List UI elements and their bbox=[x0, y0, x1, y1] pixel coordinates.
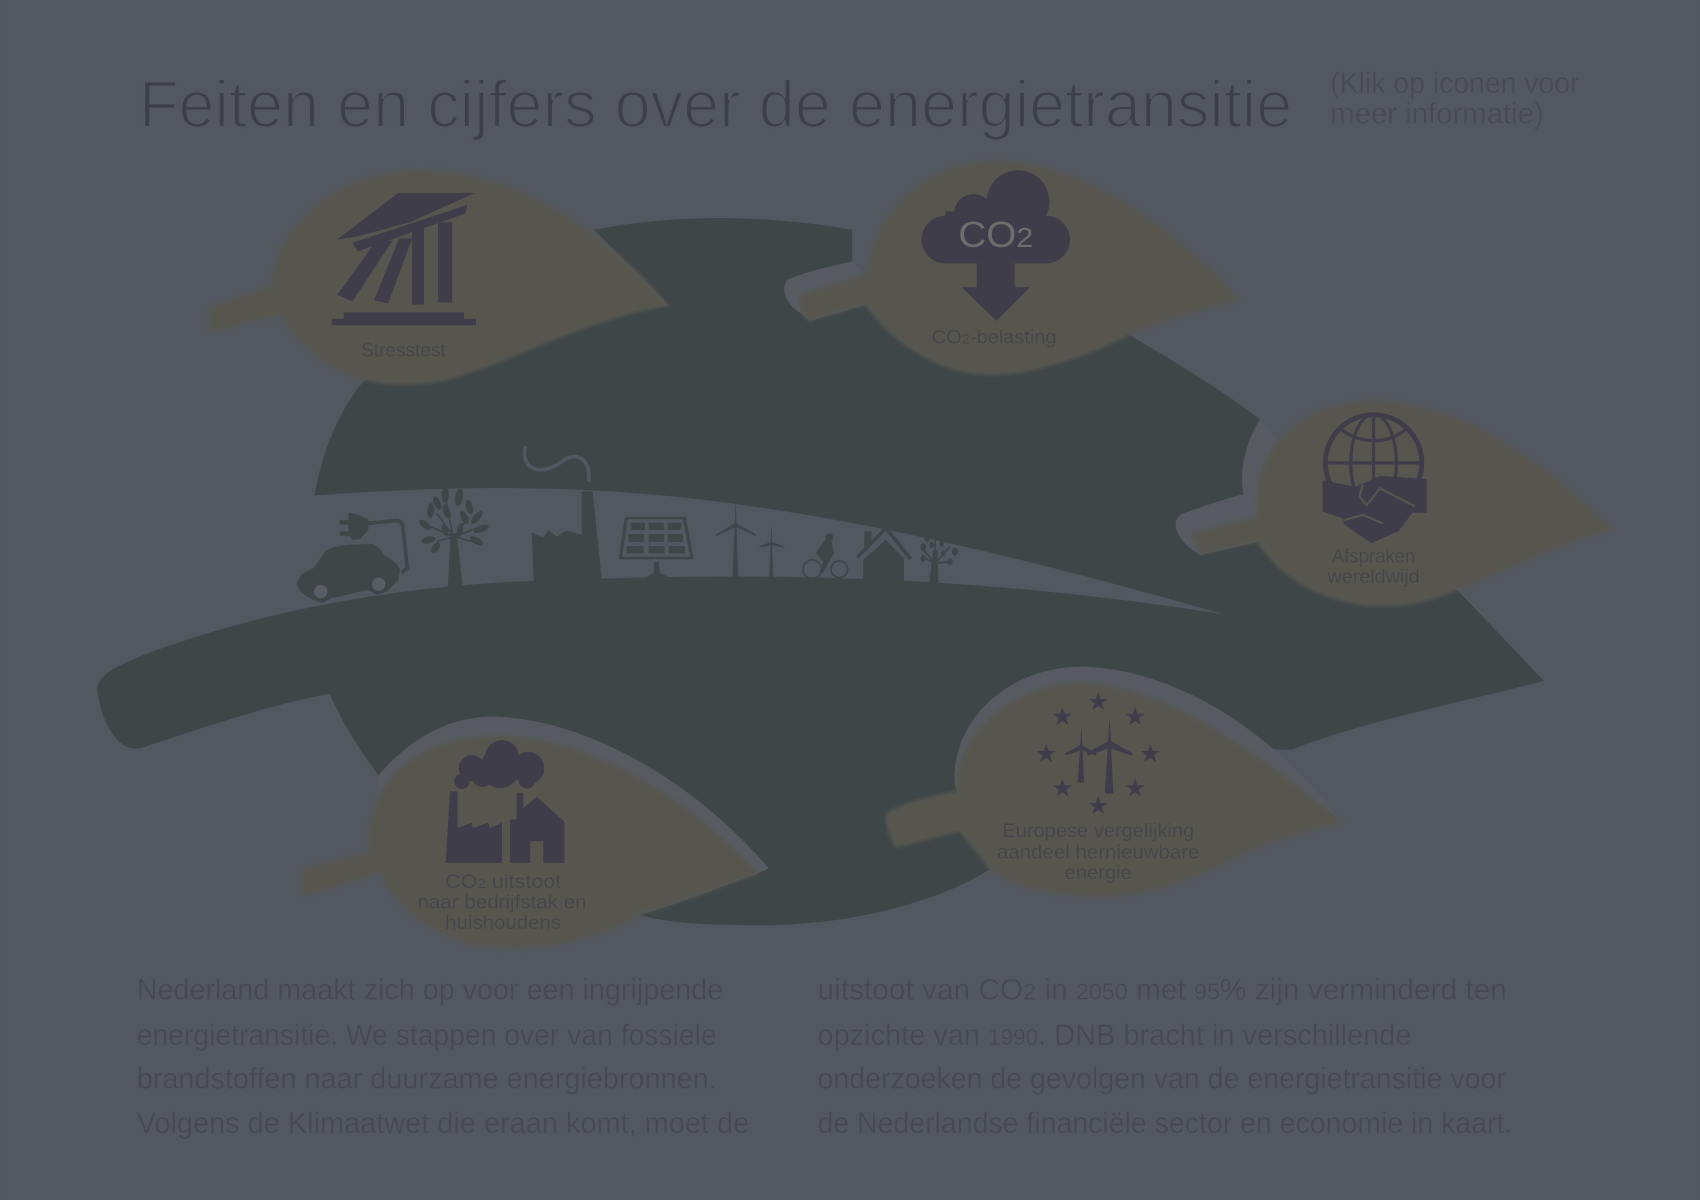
leaf panel: Afspraken wereldwijd bbox=[1176, 400, 1613, 606]
instruction note: meer informatie) bbox=[1330, 99, 1544, 131]
label: CO2 uitstoot bbox=[417, 872, 587, 934]
label: CO2 uitstoot: CO 2 uitstoot bbox=[445, 872, 562, 893]
body text: left column: energietransitie. We stappen over van fossiele bbox=[137, 1020, 717, 1052]
icon: cyclist bbox=[803, 533, 848, 579]
body text: left column: Nederland maakt zich op voor een ingrijpende bbox=[137, 974, 723, 1006]
icon: EU stars and wind turbines: ★ bbox=[1139, 740, 1161, 768]
label: Afspraken wereldwijd bbox=[1326, 547, 1420, 588]
label: CO2 uitstoot: naar bedrijfstak en bbox=[417, 892, 587, 913]
icon: CO2 cloud with arrow bbox=[922, 170, 1070, 321]
icon: EU stars and wind turbines: ★ bbox=[1087, 792, 1109, 820]
icon: EU stars and wind turbines: ★ bbox=[1124, 775, 1146, 803]
body text: left column bbox=[137, 974, 749, 1140]
body text: right column: opzichte van 1990. DNB bracht in verschillende bbox=[817, 1020, 1412, 1052]
label: Afspraken wereldwijd: Afspraken bbox=[1332, 547, 1415, 568]
leaf panel: Stresstest bbox=[209, 170, 669, 385]
label: Europese vergelijking: energie bbox=[1065, 863, 1132, 884]
label: CO2-belasting: CO2-belasting bbox=[932, 328, 1057, 349]
icon: wind turbines bbox=[716, 501, 785, 577]
icon: tree bbox=[417, 487, 490, 589]
body text: left column: Volgens de Klimaatwet die eraan komt, moet de bbox=[137, 1108, 749, 1140]
icon: globe and handshake bbox=[1323, 414, 1427, 543]
icon: factory, house and cloud bbox=[446, 740, 564, 863]
icon: factory with smoke bbox=[525, 447, 602, 587]
label: Europese vergelijking: Europese vergelijking bbox=[1002, 821, 1194, 842]
icon: EU stars and wind turbines: ★ bbox=[1051, 775, 1074, 803]
body text: right column: de Nederlandse financiële sector en economie in kaart. bbox=[817, 1108, 1512, 1140]
icon: EU stars and wind turbines: ★ bbox=[1087, 688, 1109, 716]
label: Stresstest: Stresstest bbox=[361, 341, 446, 362]
leaf panel: Europese vergelijking bbox=[886, 667, 1343, 897]
label: CO2 uitstoot: huishoudens bbox=[445, 913, 561, 934]
instruction note: (Klik op iconen voor bbox=[1330, 68, 1580, 100]
leaf panel: CO2-belasting bbox=[784, 160, 1240, 375]
icon: collapsing temple bbox=[332, 193, 476, 325]
body text: right column: uitstoot van CO2 in 2050 met 95% zijn verminderd ten bbox=[817, 974, 1507, 1006]
body text: right column: onderzoeken de gevolgen van de energietransitie voor bbox=[817, 1063, 1506, 1095]
icon: electric car bbox=[297, 513, 407, 603]
icon: EU stars and wind turbines: ★ bbox=[1124, 703, 1146, 731]
body text: left column: brandstoffen naar duurzame energiebronnen. bbox=[137, 1063, 717, 1095]
leaf panel: CO2 uitstoot bbox=[301, 717, 769, 949]
title: Feiten en cijfers over de energietransitie bbox=[139, 68, 1292, 142]
icon: small tree bbox=[920, 529, 958, 587]
icon: EU stars and wind turbines: ★ bbox=[1051, 703, 1074, 731]
big dark leaf illustration bbox=[97, 218, 1544, 925]
landscape icons row bbox=[297, 447, 958, 603]
body text: right column bbox=[817, 974, 1512, 1140]
label: Europese vergelijking bbox=[997, 821, 1200, 884]
icon: EU stars and wind turbines: ★ bbox=[1035, 740, 1057, 768]
instruction note bbox=[1330, 68, 1580, 131]
icon: EU stars and wind turbines bbox=[1035, 688, 1161, 820]
icon: house bbox=[857, 528, 911, 587]
icon: CO2 cloud with arrow: CO2 bbox=[958, 215, 1033, 255]
icon: solar panel bbox=[620, 518, 692, 577]
label: Europese vergelijking: aandeel hernieuwbare bbox=[997, 843, 1200, 864]
label: Afspraken wereldwijd: wereldwijd bbox=[1326, 567, 1420, 588]
